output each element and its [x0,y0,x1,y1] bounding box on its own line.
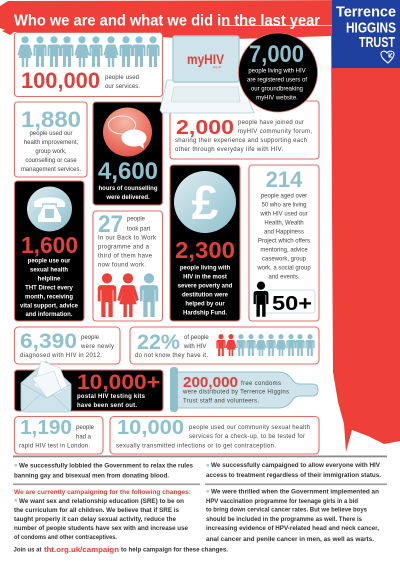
panel: 27 back to work: now found work. [98,262,146,268]
panel: 22% undiagnosed [130,327,319,364]
panel: 2,300 hardship fund: HIV in the most [183,274,227,280]
panel: 200,000 condoms: Trust staff and volunteers. [183,398,259,404]
panel: 1,600 helpline: vital support, advice [20,304,79,310]
text: currently campaigning: taught properly it can delay sexual activity, reduce the [14,516,177,523]
panel: 214 over 50: with HIV used our [259,212,308,218]
text: HPV vaccination: We were thrilled when the Government implemented an [211,488,379,496]
logo: Terrence Higgins Trust: Terrence [336,4,396,20]
panel: 10,000 community services: people used our community sexual health [189,425,310,431]
callout: 7,000 circle: our groundbreaking [251,86,303,92]
panel: 6,390 diagnosed: 6,390 [20,330,77,353]
panel: 2,000 forum: sharing their experience and supporting each [175,138,307,144]
panel: 4,600 counselling: were delivered. [105,195,150,201]
text: currently campaigning: the curriculum for all children. We believe that if SRE is [14,507,180,514]
logo: Terrence Higgins Trust [332,0,400,68]
callout: 7,000 circle: 7,000 [249,41,304,68]
panel: 2,300 hardship fund: severe poverty and [178,284,233,290]
panel: 200,000 condoms [170,367,318,412]
panel: 10,000 community services: 10,000 [117,417,184,439]
icons: three people [98,273,158,317]
text: HPV vaccination [206,488,379,543]
panel: 1,190 rapid test: had a [76,434,92,440]
panel: 27 back to work: programme and a [98,244,150,250]
rules [13,484,387,485]
text: HPV vaccination: anal cancer and penile cancer in men, as well as warts. [206,536,374,543]
panel: 22% undiagnosed: do not know they have it. [135,353,208,359]
panel: 1,600 helpline: and information. [26,312,73,318]
panel: 214 over 50 [249,165,319,321]
panel: 2,300 hardship fund: people living with [180,266,230,272]
panel: 1,880: health improvement, [24,140,79,146]
panel: 27 back to work: third of them have [98,253,153,259]
panel: 1,880 [14,102,87,177]
text: currently campaigning: We want sex and relationship education (SRE) to be on [19,498,184,505]
panel: 2,000 forum [170,101,319,159]
panel: 6,390 diagnosed: people [81,335,100,341]
panel: 214 over 50: mentoring, advice [260,248,308,254]
panel: 6,390 diagnosed: diagnosed with HIV in 2012. [20,353,102,359]
panel: 2,000 forum: 2,000 [176,117,234,139]
panel: 27 back to work: In our Back to Work [98,235,157,241]
icon: envelope [21,361,71,412]
icon: person with 50+ badge [254,282,315,317]
panel: 4,600 counselling: hours of counselling [98,186,158,192]
panel: 200,000 condoms: were distributed by Terrence Higgins [182,390,289,396]
callout: 7,000 circle: myHIV website. [256,95,298,101]
text: HPV vaccination: increasing evidence of HPV-related head and neck cancer, [206,525,379,532]
icon: person with 50+ badge: 50+ [272,293,312,315]
icon: pound coin: £ [192,177,219,230]
panel: 1,600 helpline: month, receiving [25,294,73,300]
panel: 27 back to work: took part [127,226,151,232]
panel: 1,600 helpline: THT Direct every [25,286,74,292]
text: HPV vaccination: to bring down cervical cancer rates. But we believe boys [206,506,368,514]
panel: 10,000 community services: services for a check-up, to be tested for [189,434,305,440]
text: currently campaigning [14,489,191,541]
panel: 1,880: management services. [21,167,82,173]
panel: 214 over 50: Project which offers [258,238,310,244]
text: join us: Join us at [14,546,42,554]
panel: 214 over 50: work, a social group [256,266,311,272]
icon: speech bubbles [103,108,152,156]
panel: 1,190 rapid test [14,416,103,454]
panel: 2,300 hardship fund: helped by our [185,302,225,308]
rule [13,456,387,457]
panel: 22% undiagnosed: of people [184,335,209,341]
panel: 6,390 diagnosed [14,327,120,364]
icon: pound coin [174,171,236,233]
panel: 1,880: counselling or case [25,158,77,164]
panel: 100,000 people [14,32,162,96]
icon: telephone [27,186,72,232]
text: currently campaigning: We are currently campaigning for the following changes: [14,489,191,496]
panel: 200,000 condoms: free condoms [241,381,281,387]
text: join us: to help campaign for these changes. [121,546,228,554]
panel: 1,600 helpline: people use our [28,258,71,264]
text: join us: tht.org.uk/campaign [44,545,119,554]
row of people icons [17,36,160,67]
panel: 2,000 forum: other through everyday life with HIV. [175,147,283,153]
panel: 22% undiagnosed: with HIV [183,344,206,350]
text: campaigned on immigration status: access to treatment regardless of their immigration status. [206,472,381,479]
panel: 4,600 counselling: 4,600 [98,158,158,185]
panel: 1,600 helpline [14,181,84,321]
panel: 1,190 rapid test: people [76,425,95,431]
panel: 27 back to work: 27 [98,211,123,238]
panel: 27 back to work [93,211,162,321]
panel: 10,000 community services [110,416,319,454]
panel: 10,000+ postal kits: have been sent out. [77,403,137,409]
panel: 2,300 hardship fund [170,165,240,321]
callout: 7,000 circle [238,33,318,112]
panel: 200,000 condoms: 200,000 [183,374,238,391]
text: HPV vaccination: HPV vaccination programme for teenage girls in a bid [206,498,358,505]
icons: ten people [216,334,315,356]
callout: 7,000 circle: are registered users of [247,77,307,83]
panel: 27 back to work: people [127,216,146,222]
panel: 100,000 people: our services. [105,84,140,90]
panel: 10,000+ postal kits: postal HIV testing kits [77,394,146,400]
title: Who we are and what we did in the last year [14,12,320,30]
text: campaigned on immigration status: We successfully campaigned to allow everyone with HIV [211,462,381,469]
panel: 1,880: people used our [29,131,73,137]
text: join us [14,545,228,554]
panel: 214 over 50: Health, Wealth [264,220,304,226]
callout: 7,000 circle: people living with HIV [248,68,306,74]
panel: 2,000 forum: people have joined our [238,120,304,126]
panel: 22% undiagnosed: 22% [137,331,180,354]
panel: 214 over 50: people aged over [261,194,307,200]
panel: 2,300 hardship fund: 2,300 [175,237,235,263]
panel: 1,190 rapid test: 1,190 [20,417,72,439]
panel: 1,600 helpline: 1,600 [21,232,78,258]
panel: 1,600 helpline: sexual health [30,268,68,274]
text: lobbied the Government: banning gay and bisexual men from donating blood. [14,472,169,480]
red torn background [0,0,400,452]
panel: 1,880: 1,880 [21,107,81,132]
panel: 214 over 50: 214 [266,167,303,192]
panel: 2,000 forum: myHIV community forum, [238,129,312,135]
illustration: laptop with myHIV: .org.uk [212,65,222,69]
panel: 214 over 50: 50 who are living [261,202,307,208]
panel: 6,390 diagnosed: were newly [80,344,114,350]
panel: 2,300 hardship fund: destitution were [182,292,229,298]
panel: 10,000 community services: sexually transmitted infections or to get contraception. [116,444,276,450]
panel: 214 over 50: and Happiness [264,230,304,236]
text: HPV vaccination: should be included in the programme as well. There is [206,516,363,523]
panel: 100,000 people: 100,000 [21,68,100,93]
illustration: laptop with myHIV [160,36,254,113]
text: currently campaigning: of condoms and other contraceptives. [14,534,117,541]
panel: 1,600 helpline: helpline [38,276,61,282]
panel: 1,190 rapid test: rapid HIV test in London. [19,444,90,450]
text: campaigned on immigration status [206,462,381,479]
text: currently campaigning: number of people students have sex with and increase use [14,525,189,532]
panel: 214 over 50: casework, group [262,256,307,262]
panel: 10,000+ postal kits: 10,000+ [77,371,160,394]
panel: 214 over 50: and events. [268,274,300,280]
panel: 10,000+ postal kits [14,361,163,412]
panel: 1,880: group work, [35,149,67,155]
panel: 2,300 hardship fund: Hardship Fund. [183,310,227,316]
illustration: laptop with myHIV: myHIV [187,51,225,67]
text: lobbied the Government: We successfully lobbied the Government to relax the rules [19,462,194,470]
panel: 100,000 people: people used [105,75,139,81]
text: lobbied the Government [14,462,194,480]
panel: 4,600 counselling [93,102,162,205]
